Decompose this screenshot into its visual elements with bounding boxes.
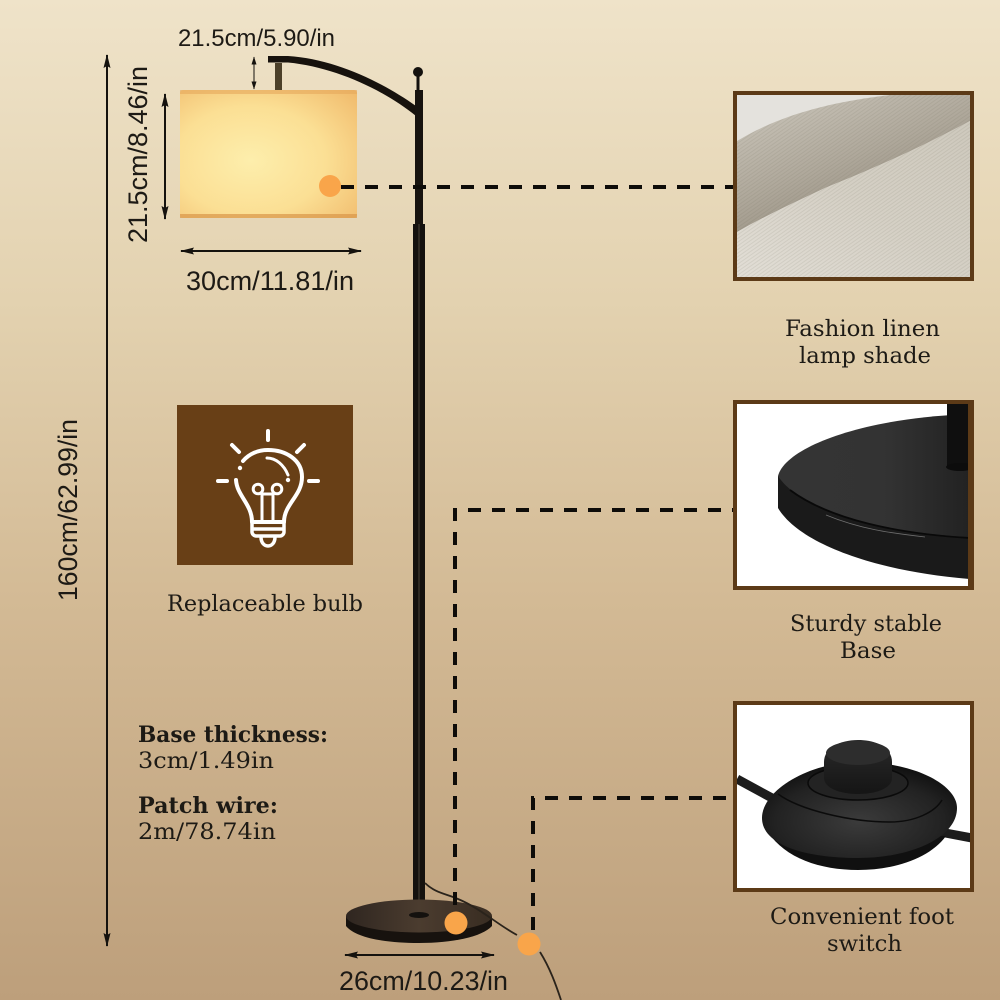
marker dot: base <box>444 912 468 934</box>
lamp shade <box>180 90 357 218</box>
panel: linen photo <box>733 91 974 281</box>
leader: switch <box>533 798 733 930</box>
base width label: 26cm/10.23/in <box>339 966 508 996</box>
drop length arrow <box>253 57 255 89</box>
floor lamp <box>180 56 561 1000</box>
base width arrow <box>345 954 494 956</box>
leader: base <box>455 510 733 905</box>
shade width label: 30cm/11.81/in <box>186 266 354 296</box>
overall height dimension: 160cm/62.99/in <box>53 419 83 601</box>
lamp pole <box>413 67 425 912</box>
bulb caption: Replaceable bulb <box>167 592 363 617</box>
base thickness text <box>138 722 328 774</box>
drop length label: 21.5cm/5.90/in <box>178 25 335 52</box>
patch wire text: 2m/78.74in <box>138 820 276 845</box>
caption: linen <box>785 317 940 369</box>
shade height arrow <box>164 94 166 219</box>
panel: switch photo <box>733 701 974 892</box>
base thickness text: 3cm/1.49in <box>138 749 274 774</box>
patch wire text <box>138 793 278 845</box>
caption: linen: lamp shade <box>799 344 931 369</box>
marker dot: switch <box>518 932 540 956</box>
bulb panel <box>177 405 353 565</box>
base thickness text: Base thickness: <box>138 722 328 748</box>
caption: base <box>790 612 942 664</box>
caption: base: Base <box>840 639 896 664</box>
leader: lamp shade <box>341 185 733 189</box>
patch wire text: Patch wire: <box>138 793 278 819</box>
caption: switch: switch <box>827 932 902 957</box>
caption: switch: Convenient foot <box>770 905 954 930</box>
power cord <box>425 883 561 1000</box>
shade height label: 21.5cm/8.46/in <box>123 66 153 243</box>
caption: base: Sturdy stable <box>790 612 942 637</box>
panel: base photo <box>733 400 974 590</box>
shade width arrow <box>181 250 361 252</box>
lamp arm <box>268 56 416 116</box>
marker dot: shade <box>319 175 341 197</box>
icon: light bulb <box>218 431 318 546</box>
lamp base <box>346 900 492 943</box>
caption: linen: Fashion linen <box>785 317 940 342</box>
caption: switch <box>770 905 954 957</box>
